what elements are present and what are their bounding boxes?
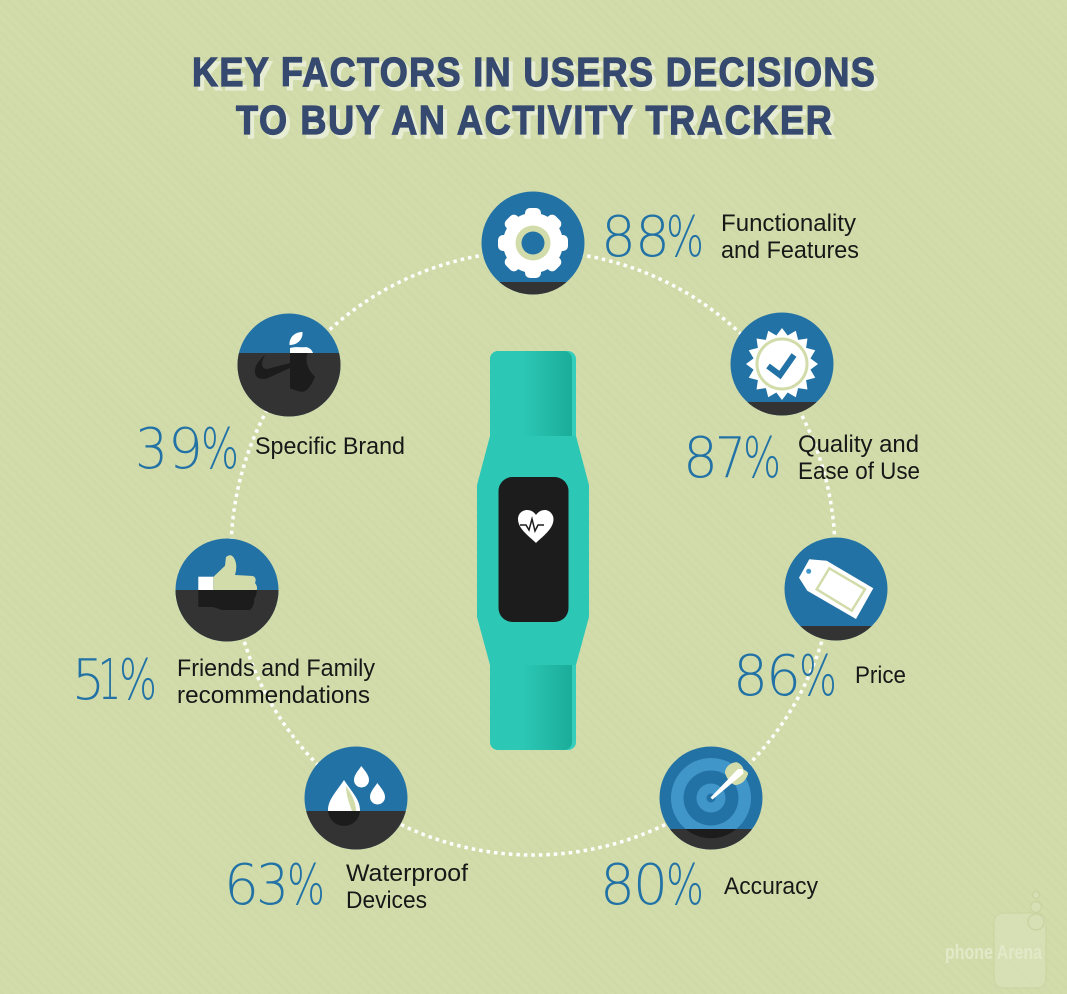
icon: thumbs up xyxy=(176,538,278,642)
label: waterproof devices: Waterproof xyxy=(346,860,468,887)
percentage: 39%: % xyxy=(201,417,239,482)
label: quality and ease of use: Ease of Use xyxy=(798,458,920,485)
top strap xyxy=(490,351,576,451)
item: quality and ease of use xyxy=(683,312,920,491)
watermark: phoneArena xyxy=(945,892,1046,988)
label: accuracy: Accuracy xyxy=(724,873,818,900)
percentage: 88%: 8 xyxy=(635,205,670,270)
label: functionality and features: Functionality xyxy=(721,210,856,237)
label: functionality and features xyxy=(721,210,859,264)
title: TO BUY AN ACTIVITY TRACKER xyxy=(240,102,836,148)
title: TO BUY AN ACTIVITY TRACKER xyxy=(236,98,832,144)
percentage: 51%: 5 xyxy=(72,648,105,713)
icon: water drops xyxy=(300,746,412,851)
item: waterproof devices xyxy=(224,746,468,918)
percentage: 39%: 9 xyxy=(168,417,203,482)
percentage: 88%: % xyxy=(666,205,704,270)
icon: check badge xyxy=(730,312,834,416)
percentage: 39%: 3 xyxy=(135,417,168,482)
label: friends and family recommendations: recommendations xyxy=(177,682,370,709)
title: KEY FACTORS IN USERS DECISIONS xyxy=(196,54,879,100)
percentage: 86%: 6 xyxy=(766,644,801,709)
label: waterproof devices: Devices xyxy=(346,887,427,914)
percentage: 51%: 1 xyxy=(98,648,121,713)
dotted ring xyxy=(231,251,835,855)
label: specific brand: Specific Brand xyxy=(255,433,405,460)
item: accuracy xyxy=(600,746,818,918)
icon: heart with pulse xyxy=(518,510,554,543)
percentage: 87%: 8 xyxy=(683,426,718,491)
watermark: phoneArena: phone Arena xyxy=(945,942,1043,964)
percentage: 80% xyxy=(600,853,704,918)
percentage: 88% xyxy=(601,205,704,270)
percentage: 80%: 0 xyxy=(633,853,668,918)
item: functionality and features xyxy=(470,192,859,296)
percentage: 87%: 7 xyxy=(715,426,746,491)
icon: gear xyxy=(482,192,584,294)
activity tracker band xyxy=(477,351,589,750)
percentage: 87% xyxy=(683,426,781,491)
label: waterproof devices xyxy=(346,860,468,914)
percentage: 39% xyxy=(135,417,239,482)
percentage: 86%: 8 xyxy=(733,644,768,709)
icon: brand logos xyxy=(238,314,340,416)
percentage: 63%: 3 xyxy=(256,853,289,918)
title xyxy=(192,50,879,148)
item: price xyxy=(738,538,905,696)
item: friends and family xyxy=(72,538,375,713)
label: friends and family recommendations: Friends and Family xyxy=(177,655,375,682)
item: specific brand xyxy=(135,314,405,482)
percentage: 86% xyxy=(733,644,837,709)
percentage: 80%: 8 xyxy=(600,853,635,918)
bottom strap xyxy=(490,650,576,750)
title: KEY FACTORS IN USERS DECISIONS xyxy=(192,50,875,96)
percentage: 88%: 8 xyxy=(601,205,636,270)
label: functionality and features: and Features xyxy=(721,237,859,264)
percentage: 51%: % xyxy=(119,648,157,713)
percentage: 63% xyxy=(224,853,325,918)
label: friends and family recommendations xyxy=(177,655,375,709)
percentage: 80%: % xyxy=(666,853,704,918)
percentage: 86%: % xyxy=(799,644,837,709)
label: price: Price xyxy=(855,662,906,689)
percentage: 51% xyxy=(72,648,157,713)
icon: target and dart xyxy=(655,746,767,851)
percentage: 63%: % xyxy=(287,853,325,918)
label: quality and ease of use xyxy=(798,431,920,485)
tracker body xyxy=(477,436,589,665)
percentage: 63%: 6 xyxy=(224,853,259,918)
tracker screen xyxy=(498,477,568,622)
percentage: 87%: % xyxy=(743,426,781,491)
label: quality and ease of use: Quality and xyxy=(798,431,919,458)
icon: price tag xyxy=(780,538,892,642)
